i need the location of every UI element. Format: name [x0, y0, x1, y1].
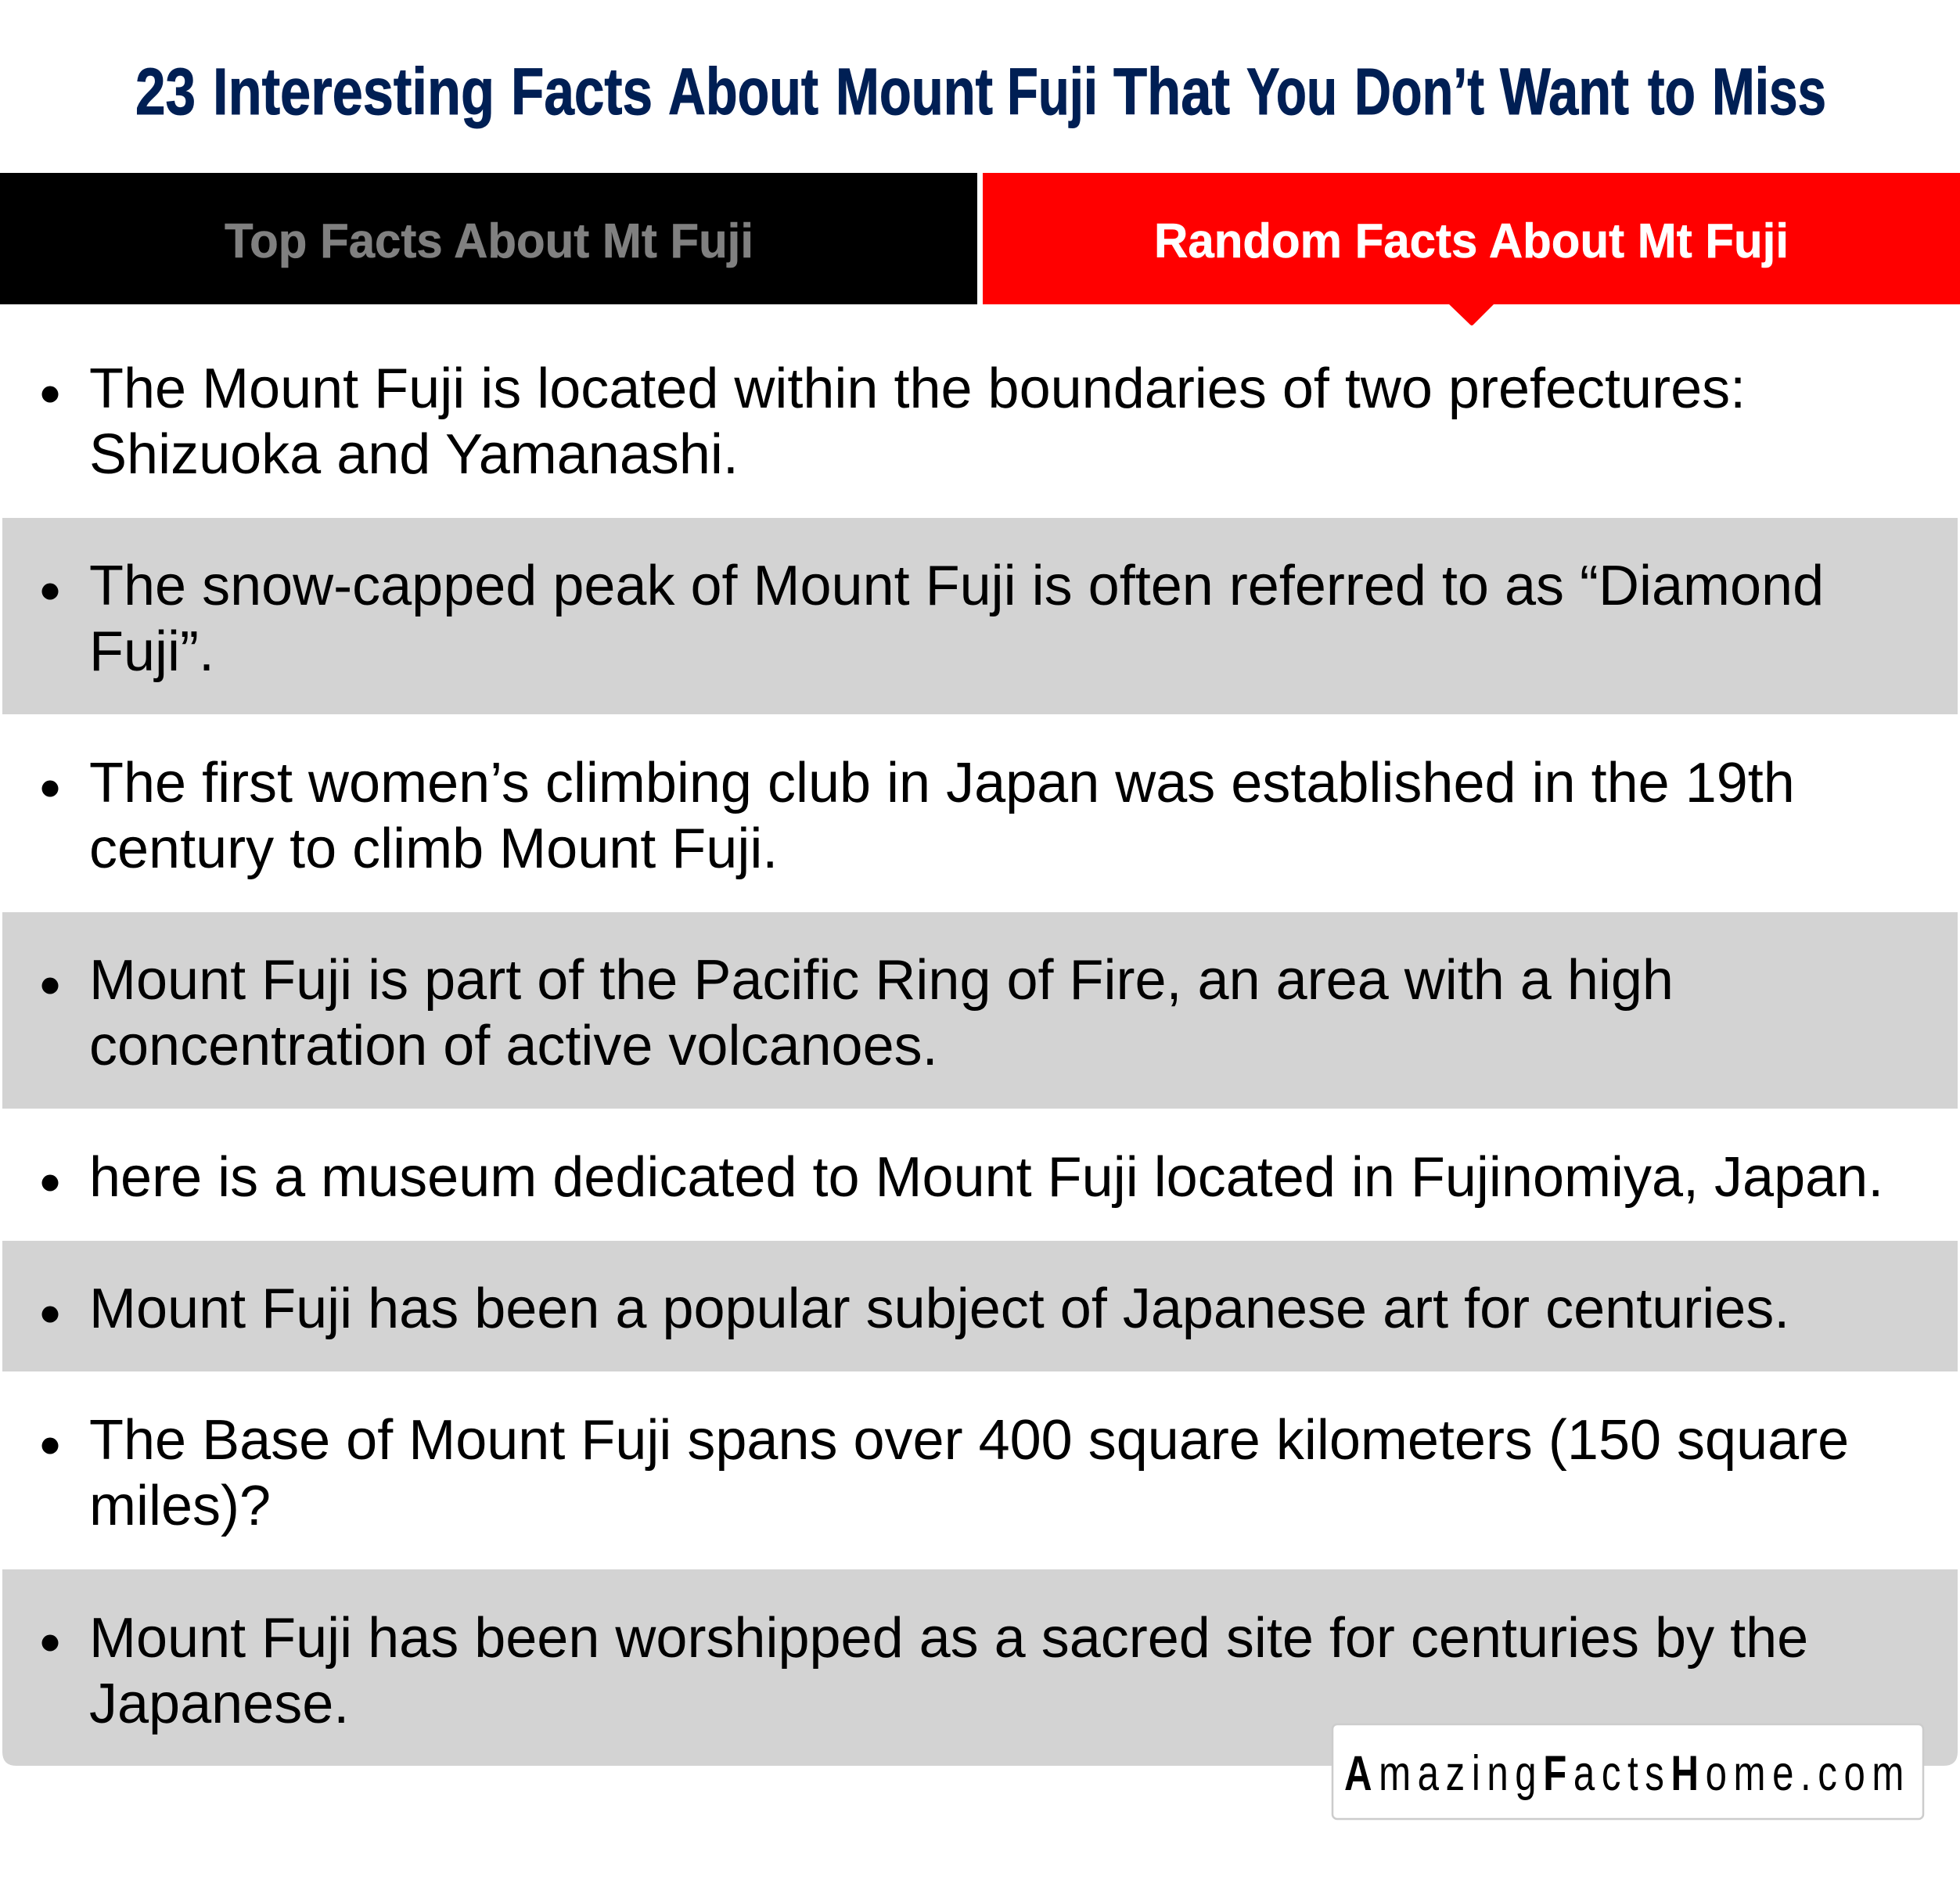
fact 2: Fuji”. — [89, 620, 214, 683]
title: Facts — [511, 55, 653, 128]
title: Interesting — [213, 55, 494, 128]
title: to — [1648, 55, 1696, 128]
fact 3: The first women’s climbing club in Japan was established in the 19th — [89, 752, 1795, 814]
tab: top facts: Top Facts About Mt Fuji — [225, 214, 753, 268]
title: 23 — [135, 55, 196, 128]
fact 4 — [2, 912, 1958, 1109]
fact 2: The snow-capped peak of Mount Fuji is often referred to as “Diamond — [89, 555, 1824, 617]
tab: random facts — [983, 173, 1960, 325]
fact 4: Mount Fuji is part of the Pacific Ring of Fire, an area with a high — [89, 949, 1674, 1012]
watermark badge — [1332, 1724, 1923, 1819]
fact 8 — [2, 1569, 1958, 1766]
fact 4: concentration of active volcanoes. — [89, 1015, 938, 1077]
fact 8: Mount Fuji has been worshipped as a sacred site for centuries by the — [89, 1607, 1808, 1670]
title: Fuji — [1007, 55, 1098, 128]
fact 2 — [2, 518, 1958, 714]
fact 3 — [42, 752, 1795, 880]
fact 6: Mount Fuji has been a popular subject of Japanese art for centuries. — [89, 1278, 1789, 1340]
tab: top facts — [0, 173, 977, 304]
title: Want — [1500, 55, 1629, 128]
fact 7: The Base of Mount Fuji spans over 400 square kilometers (150 square — [89, 1409, 1849, 1472]
fact 7 — [42, 1409, 1849, 1537]
fact 8: Japanese. — [89, 1673, 349, 1735]
fact 1 — [42, 358, 1746, 486]
title: About — [668, 55, 818, 128]
title — [135, 55, 1826, 128]
fact 1: The Mount Fuji is located within the boundaries of two prefectures: — [89, 358, 1746, 420]
watermark badge: AmazingFactsHome.com — [1344, 1746, 1911, 1801]
fact 6 — [2, 1241, 1958, 1371]
title: That — [1113, 55, 1230, 128]
title: Miss — [1712, 55, 1826, 128]
title: You — [1246, 55, 1337, 128]
tab: random facts: Random Facts About Mt Fuji — [1154, 214, 1789, 268]
fact 7: miles)? — [89, 1475, 271, 1537]
fact 5: here is a museum dedicated to Mount Fuji located in Fujinomiya, Japan. — [89, 1146, 1883, 1209]
fact 3: century to climb Mount Fuji. — [89, 818, 778, 880]
title: Mount — [836, 55, 993, 128]
title: Don’t — [1354, 55, 1484, 128]
fact 1: Shizuoka and Yamanashi. — [89, 423, 739, 486]
